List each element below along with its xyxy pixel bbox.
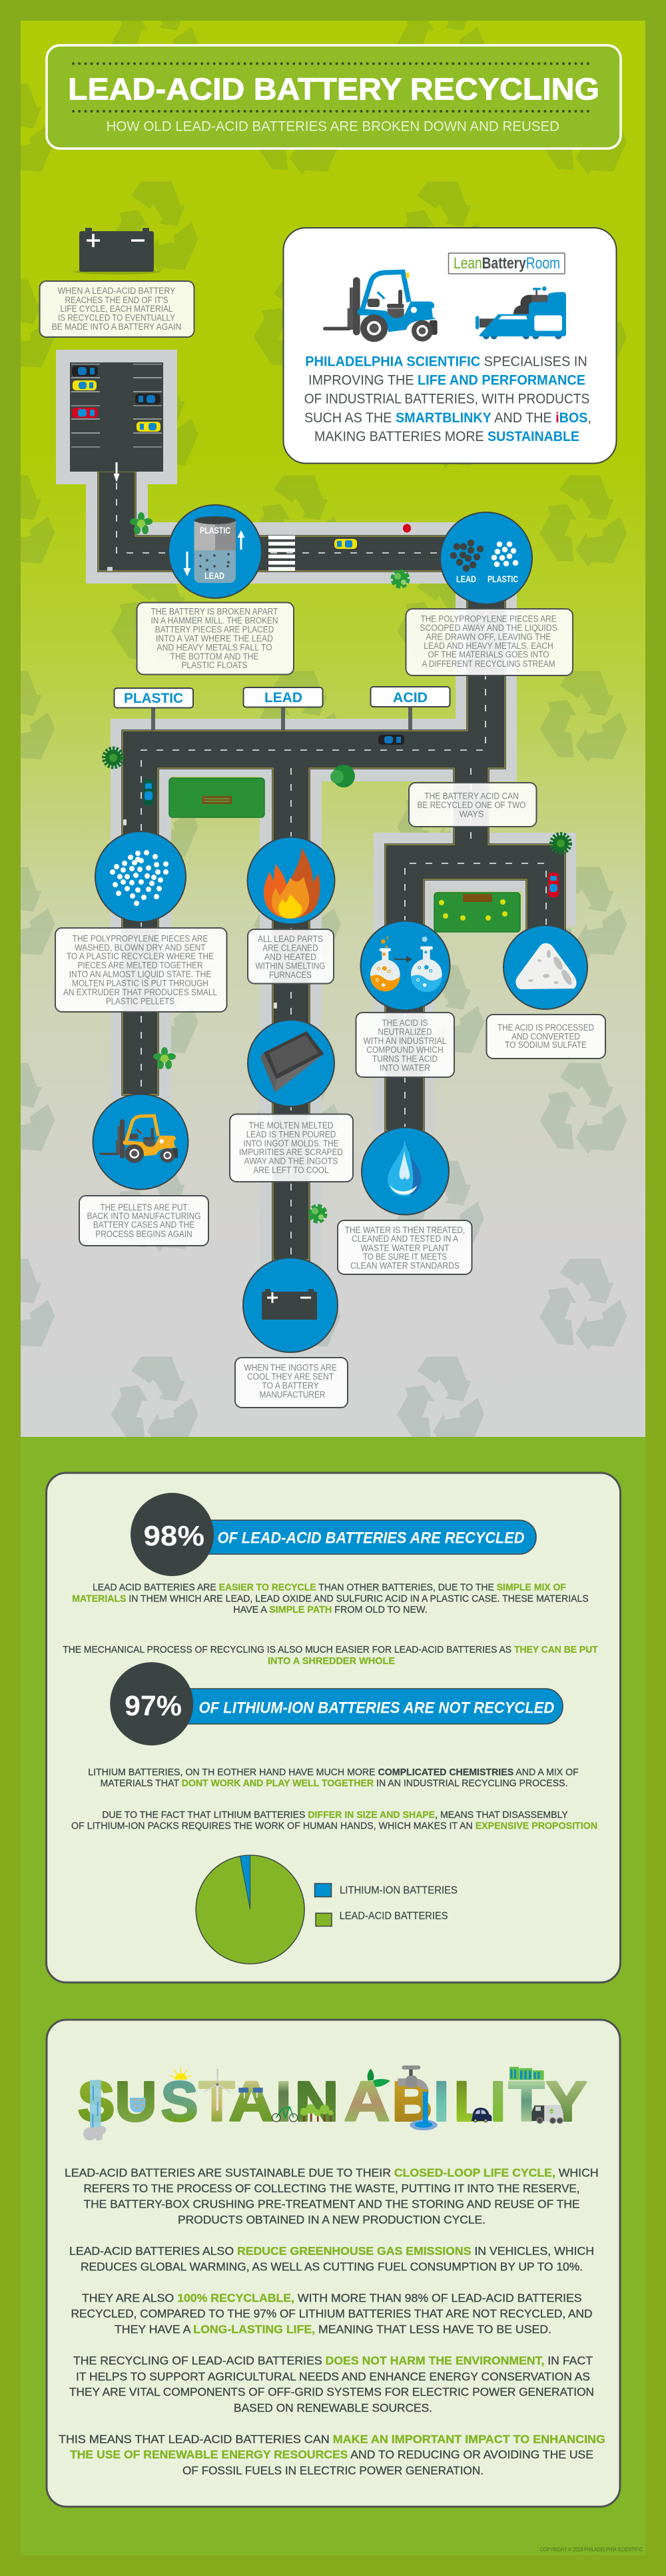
- callout: acid neutralized: INTO WATER: [380, 1063, 430, 1073]
- callout: polypropylene washing: PIECES ARE MELTED TOGETHER: [77, 961, 203, 970]
- text: greenhouse gas: REDUCES GLOBAL WARMING, AS WELL AS CUTTING FUEL CONSUMPTION BY UP TO 10%.: [81, 2260, 583, 2273]
- arrow: road direction: [113, 462, 120, 482]
- pie chart: [196, 1855, 304, 1964]
- text: 100% recyclable: RECYCLED, COMPARED TO THE 97% OF LITHIUM BATTERIES THAT ARE NOT RECYCLED, AND: [71, 2307, 593, 2320]
- heading: SUSTAINABILITY lettering: T: [509, 2070, 545, 2133]
- callout: smelting: [248, 929, 334, 983]
- callout: smelting: ARE CLEANED: [262, 943, 318, 953]
- callout: pellets: BATTERY CASES AND THE: [93, 1220, 194, 1230]
- callout: polypropylene separation: SCOOPED AWAY AND THE LIQUIDS: [420, 623, 557, 633]
- callout: polypropylene washing: TO A PLASTIC RECYCLER WHERE THE: [67, 951, 214, 961]
- callout: polypropylene washing: MOLTEN PLASTIC IS PUT THROUGH: [72, 978, 208, 989]
- icons: waterfall, sun, turbine, solar, bike, trees: [83, 2068, 334, 2140]
- callout: pellets: THE PELLETS ARE PUT: [100, 1202, 188, 1212]
- heading: SUSTAINABILITY lettering: S: [161, 2070, 198, 2133]
- process section background: [21, 21, 645, 1437]
- callout: pellets: [79, 1196, 208, 1246]
- company statement: PHILADELPHIA SCIENTIFIC SPECIALISES IN: [305, 354, 587, 369]
- text: closed loop life cycle: PRODUCTS OBTAINED IN A NEW PRODUCTION CYCLE.: [178, 2213, 486, 2226]
- text: easier to recycle: [72, 1581, 589, 1615]
- callout: polypropylene washing: PLASTIC PELLETS: [106, 997, 174, 1006]
- callout: end of life: [40, 281, 194, 337]
- step circle: hammer mill vat: [168, 505, 262, 598]
- callout: end of life: LIFE CYCLE, EACH MATERIAL: [60, 304, 173, 314]
- callout: acid neutralized: WITH AN INDUSTRIAL: [364, 1036, 447, 1046]
- road network: [56, 350, 576, 1266]
- text: easier to recycle: MATERIALS IN THEM WHICH ARE LEAD, LEAD OXIDE AND SULFURIC ACID IN A PLASTIC CASE. THESE MATERIALS: [72, 1593, 589, 1604]
- callout: sodium sulfate: [486, 1015, 605, 1059]
- callout: acid two ways: [409, 783, 537, 827]
- moving cars: [143, 539, 559, 897]
- callout: acid neutralized: COMPOUND WHICH: [366, 1045, 444, 1055]
- company statement: IMPROVING THE LIFE AND PERFORMANCE: [308, 373, 585, 388]
- callout: smelting: FURNACES: [269, 970, 312, 980]
- callout: hammer mill: THE BATTERY IS BROKEN APART: [151, 606, 278, 616]
- callout: polypropylene separation: THE POLYPROPYLENE PIECES ARE: [421, 614, 557, 624]
- stat bar: 98%: 98%: [144, 1520, 204, 1552]
- callout: battery manufacturer: TO A BATTERY: [262, 1381, 319, 1391]
- callout: smelting: ALL LEAD PARTS: [258, 934, 323, 944]
- stat bar: 97%: 97%: [125, 1690, 182, 1722]
- company statement: [304, 354, 591, 444]
- callout: acid two ways: WAYS: [460, 809, 484, 819]
- callout: polypropylene washing: THE POLYPROPYLENE PIECES ARE: [73, 934, 208, 944]
- callout: water treated: CLEAN WATER STANDARDS: [350, 1260, 460, 1271]
- callout: sodium sulfate: TO SODIUM SULFATE: [505, 1040, 587, 1050]
- company statement: SUCH AS THE SMARTBLINKY AND THE iBOS,: [304, 410, 591, 426]
- callout: ingot molds: [230, 1114, 353, 1182]
- facts section background: [21, 1437, 645, 2555]
- company statement: MAKING BATTERIES MORE SUSTAINABLE: [314, 429, 579, 444]
- callout: water treated: TO BE SURE IT MEETS: [363, 1252, 447, 1262]
- text: environment: [69, 2354, 594, 2414]
- text: size and shape: OF LITHIUM-ION PACKS REQUIRES THE WORK OF HUMAN HANDS, WHICH MAKES IT AN EXPENSIVE PROPOSITION: [71, 1820, 597, 1832]
- heading: SUSTAINABILITY lettering: Y: [546, 2070, 587, 2133]
- text: greenhouse gas: LEAD-ACID BATTERIES ALSO REDUCE GREENHOUSE GAS EMISSIONS IN VEHICLES, WHICH: [69, 2244, 594, 2258]
- heading: SUSTAINABILITY lettering: T: [198, 2070, 234, 2133]
- heading: SUSTAINABILITY lettering: U: [115, 2070, 157, 2133]
- title banner: [47, 45, 621, 149]
- callout: end of life: WHEN A LEAD-ACID BATTERY: [58, 286, 175, 296]
- callout: pellets: BACK INTO MANUFACTURING: [87, 1211, 201, 1221]
- step circle: plastic pieces: [95, 831, 186, 922]
- callout: smelting: WITHIN SMELTING: [256, 961, 325, 971]
- logo: LeanBatteryRoom: LeanBatteryRoom: [454, 254, 560, 272]
- trees: [105, 512, 569, 1222]
- text: easier to recycle: HAVE A SIMPLE PATH FROM OLD TO NEW.: [233, 1604, 428, 1615]
- step circle: smelting furnace flame: [248, 837, 334, 925]
- callout: battery manufacturer: COOL THEY ARE SENT: [247, 1372, 334, 1382]
- callout: acid neutralized: [356, 1013, 454, 1077]
- step circle: lead and plastic separated: PLASTIC: [488, 574, 518, 584]
- callout: acid two ways: BE RECYCLED ONE OF TWO: [417, 800, 526, 810]
- step circle: acid neutralizing flasks: [361, 921, 450, 1010]
- text: 100% recyclable: THEY ARE ALSO 100% RECYCLABLE, WITH MORE THAN 98% OF LEAD-ACID BATTERIES: [82, 2292, 582, 2305]
- parked cars: [72, 366, 161, 432]
- sign: lead: [244, 687, 322, 731]
- park: acid loop: [434, 893, 520, 932]
- step circle: hammer mill vat: PLASTIC: [200, 525, 230, 536]
- callout: battery manufacturer: WHEN THE INGOTS ARE: [244, 1363, 337, 1373]
- callout: acid two ways: THE BATTERY ACID CAN: [424, 791, 519, 801]
- callout: polypropylene washing: WASHED, BLOWN DRY AND SENT: [75, 943, 206, 953]
- callout: battery manufacturer: MANUFACTURER: [260, 1390, 326, 1400]
- heading: SUSTAINABILITY lettering: S: [77, 2070, 115, 2133]
- step circle: new battery: [243, 1258, 338, 1352]
- sign: acid: ACID: [393, 690, 428, 705]
- heading: SUSTAINABILITY lettering: [77, 2070, 587, 2133]
- callout: hammer mill: [137, 602, 294, 674]
- callout: sodium sulfate: AND CONVERTED: [511, 1032, 580, 1042]
- callout: hammer mill: BATTERY PIECES ARE PLACED: [155, 625, 274, 635]
- callout: water treated: [338, 1220, 472, 1274]
- park: plastic road: [169, 778, 264, 817]
- chart legend: LEAD-ACID BATTERIES: [340, 1911, 448, 1922]
- callout: water treated: WASTE WATER PLANT: [361, 1243, 449, 1253]
- sign: acid: [370, 687, 450, 731]
- callout: hammer mill: PLASTIC FLOATS: [181, 660, 248, 670]
- text: greenhouse gas: [69, 2244, 594, 2273]
- sign: plastic: [115, 688, 193, 731]
- text: lithium chemistries: MATERIALS THAT DONT WORK AND PLAY WELL TOGETHER IN AN INDUSTRIAL RECYCLING PROCESS.: [100, 1777, 567, 1789]
- callout: sodium sulfate: THE ACID IS PROCESSED: [498, 1023, 594, 1033]
- heading: SUSTAINABILITY lettering: I: [490, 2070, 505, 2133]
- callout: pellets: PROCESS BEGINS AGAIN: [95, 1229, 192, 1239]
- callout: acid neutralized: THE ACID IS: [382, 1018, 428, 1028]
- text: environment: IT HELPS TO SUPPORT AGRICULTURAL NEEDS AND ENHANCE ENERGY CONSERVATION AS: [76, 2370, 590, 2383]
- callout: hammer mill: THE BOTTOM AND THE: [170, 651, 258, 661]
- text: renewable energy: [59, 2433, 605, 2477]
- heading: SUSTAINABILITY lettering: B: [392, 2070, 432, 2133]
- panel: recycling rates: [47, 1473, 621, 1982]
- chart legend: [314, 1884, 458, 1927]
- heading: SUSTAINABILITY lettering: I: [276, 2070, 291, 2133]
- text: closed loop life cycle: THE BATTERY-BOX CRUSHING PRE-TREATMENT AND THE STORING AND REUSE OF THE: [84, 2197, 579, 2210]
- callout: polypropylene separation: ARE DRAWN OFF, LEAVING THE: [426, 632, 551, 642]
- callout: polypropylene separation: A DIFFERENT RECYCLING STREAM: [422, 659, 555, 669]
- sign: plastic: PLASTIC: [124, 691, 183, 706]
- callout: end of life: IS RECYCLED TO EVENTUALLY: [58, 313, 175, 322]
- text: closed loop life cycle: REFERS TO THE PROCESS OF COLLECTING THE WASTE, PUTTING IT INTO THE RESERVE,: [84, 2182, 579, 2195]
- text: mechanical process: INTO A SHREDDER WHOLE: [268, 1655, 395, 1667]
- panel: sustainability: [47, 2020, 620, 2507]
- callout: ingot molds: LEAD IS THEN POURED: [246, 1130, 336, 1139]
- text: closed loop life cycle: [65, 2166, 599, 2226]
- icon: blue shredder machine: [476, 286, 566, 339]
- step circle: hammer mill vat: LEAD: [204, 570, 224, 581]
- callout: water treated: CLEANED AND TESTED IN A: [352, 1234, 458, 1244]
- callout: ingot molds: ARE LEFT TO COOL: [253, 1165, 329, 1175]
- callout: ingot molds: AWAY AND THE INGOTS: [244, 1156, 338, 1166]
- step circle: ingot mold: [248, 1020, 334, 1106]
- text: 100% recyclable: THEY HAVE A LONG-LASTING LIFE, MEANING THAT LESS HAVE TO BE USED.: [115, 2322, 551, 2336]
- callout: polypropylene washing: INTO AN ALMOST LIQUID STATE. THE: [69, 969, 211, 979]
- text: easier to recycle: LEAD ACID BATTERIES ARE EASIER TO RECYCLE THAN OTHER BATTERIES, DUE TO THE SIMPLE MIX OF: [93, 1581, 566, 1593]
- callout: polypropylene separation: LEAD AND HEAVY METALS. EACH: [424, 641, 553, 651]
- step circle: yellow forklift: [93, 1094, 188, 1190]
- step circle: water drop: [362, 1127, 449, 1215]
- text: 100% recyclable: [71, 2292, 593, 2336]
- callout: acid neutralized: TURNS THE ACID: [372, 1054, 438, 1064]
- callout: polypropylene washing: AN EXTRUDER THAT PRODUCES SMALL: [63, 987, 217, 997]
- callout: ingot molds: INTO INGOT MOLDS. THE: [244, 1138, 338, 1148]
- text: size and shape: DUE TO THE FACT THAT LITHIUM BATTERIES DIFFER IN SIZE AND SHAPE, MEANS THAT DISASSEMBLY: [102, 1809, 568, 1821]
- callout: end of life: REACHES THE END OF IT'S: [65, 295, 168, 305]
- text: lithium chemistries: [88, 1767, 579, 1789]
- text: renewable energy: THE USE OF RENEWABLE ENERGY RESOURCES AND TO REDUCING OR AVOIDING THE USE: [70, 2447, 593, 2461]
- text: environment: THE RECYCLING OF LEAD-ACID BATTERIES DOES NOT HARM THE ENVIRONMENT, IN FACT: [73, 2354, 593, 2367]
- company statement: OF INDUSTRIAL BATTERIES, WITH PRODUCTS: [304, 392, 589, 406]
- sign: lead: LEAD: [264, 690, 302, 705]
- text: closed loop life cycle: LEAD-ACID BATTERIES ARE SUSTAINABLE DUE TO THEIR CLOSED-LOOP LIFE CYCLE, WHICH: [65, 2166, 599, 2180]
- text: mechanical process: THE MECHANICAL PROCESS OF RECYCLING IS ALSO MUCH EASIER FOR LEAD-ACID BATTERIES AS THEY CAN BE PUT: [63, 1644, 598, 1655]
- text: lithium chemistries: LITHIUM BATTERIES, ON TH EOTHER HAND HAVE MUCH MORE COMPLICATED CHEMISTRIES AND A MIX OF: [88, 1767, 579, 1778]
- title banner: HOW OLD LEAD-ACID BATTERIES ARE BROKEN DOWN AND REUSED: [107, 119, 559, 135]
- callout: smelting: AND HEATED: [264, 952, 316, 962]
- callout: polypropylene separation: OF THE MATERIALS GOES INTO: [428, 649, 549, 659]
- heading: SUSTAINABILITY lettering: I: [434, 2070, 449, 2133]
- panel: Philadelphia Scientific: [284, 228, 617, 464]
- step circle: lead and plastic separated: LEAD: [456, 574, 476, 584]
- callout: battery manufacturer: [235, 1358, 348, 1408]
- stat bar: 98%: [131, 1493, 536, 1576]
- callout: end of life: BE MADE INTO A BATTERY AGAIN: [52, 322, 181, 332]
- crosswalk: [268, 536, 295, 571]
- step circle: sodium sulfate powder: [503, 925, 587, 1009]
- text: renewable energy: THIS MEANS THAT LEAD-ACID BATTERIES CAN MAKE AN IMPORTANT IMPACT TO ENHANCING: [59, 2433, 605, 2446]
- heading: SUSTAINABILITY lettering: A: [229, 2070, 274, 2133]
- callout: polypropylene separation: [406, 609, 573, 675]
- stat bar: 98%: OF LEAD-ACID BATTERIES ARE RECYCLED: [217, 1529, 525, 1547]
- icon: blue forklift: [323, 272, 438, 342]
- text: environment: BASED ON RENEWABLE SOURCES.: [234, 2401, 432, 2414]
- text: mechanical process: [63, 1644, 598, 1667]
- heading: SUSTAINABILITY lettering: N: [294, 2070, 338, 2133]
- stat bar: 97%: [110, 1662, 563, 1745]
- callout: ingot molds: THE MOLTEN MELTED: [249, 1120, 334, 1130]
- chart legend: LITHIUM-ION BATTERIES: [340, 1885, 458, 1896]
- text: renewable energy: OF FOSSIL FUELS IN ELECTRIC POWER GENERATION.: [182, 2463, 484, 2477]
- copyright: COPYRIGHT © 2019 PHILADELPHIA SCIENTIFIC: [540, 2547, 643, 2553]
- step circle: lead and plastic separated: [440, 512, 532, 604]
- icon: old battery: [73, 228, 160, 274]
- callout: polypropylene washing: [55, 928, 226, 1012]
- heading: SUSTAINABILITY lettering: L: [454, 2070, 488, 2133]
- callout: water treated: THE WATER IS THEN TREATED,: [345, 1225, 465, 1235]
- callout: hammer mill: AND HEAVY METALS FALL TO: [157, 642, 272, 652]
- callout: ingot molds: IMPURITIES ARE SCRAPED: [239, 1147, 343, 1157]
- callout: acid neutralized: NEUTRALIZED: [378, 1027, 432, 1037]
- icons: leaves, faucet, car, buildings, recycling truck: [368, 2066, 563, 2130]
- callout: hammer mill: IN A HAMMER MILL. THE BROKEN: [151, 616, 278, 626]
- callout: hammer mill: INTO A VAT WHERE THE LEAD: [156, 634, 273, 644]
- stat bar: 97%: OF LITHIUM-ION BATTERIES ARE NOT RECYCLED: [198, 1699, 554, 1717]
- title banner: LEAD-ACID BATTERY RECYCLING: [68, 72, 599, 107]
- road markers: [107, 524, 411, 1009]
- text: environment: THEY ARE VITAL COMPONENTS OF OFF-GRID SYSTEMS FOR ELECTRIC POWER GENERATION: [69, 2385, 594, 2398]
- text: size and shape: [71, 1809, 597, 1832]
- heading: SUSTAINABILITY lettering: A: [344, 2070, 390, 2133]
- recycling symbols pattern: [21, 21, 645, 1437]
